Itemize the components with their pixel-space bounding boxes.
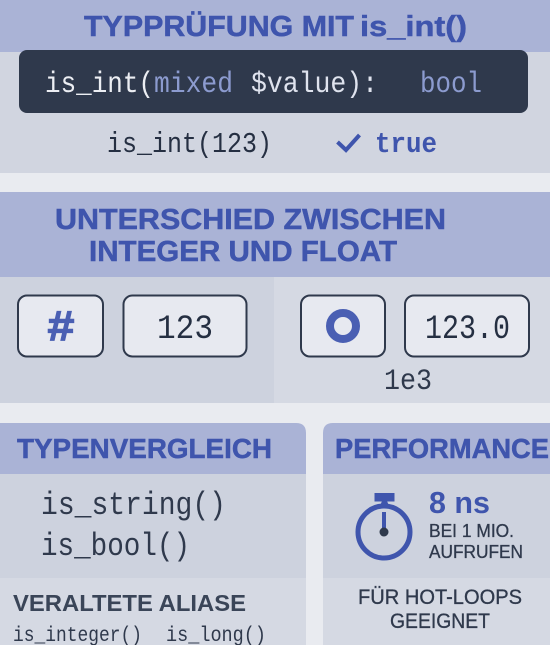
code signature box: bool — [420, 68, 482, 102]
icon box: hash: # — [47, 304, 75, 354]
caption: bei 1 mio. aufrufen: AUFRUFEN — [429, 542, 523, 562]
panel: typprüfung — [0, 0, 550, 173]
code: is_bool: is_bool() — [41, 528, 190, 565]
value box: 123.0: 123.0 — [425, 311, 510, 349]
heading: typprüfung mit is_int: TYPPRÜFUNG MIT — [84, 10, 354, 43]
panel: unterschied integer und float — [0, 192, 550, 403]
code signature box: $value): — [251, 68, 378, 102]
code signature box: is_int( — [45, 68, 154, 102]
icon: stopwatch — [358, 493, 410, 558]
label: 1e3: 1e3 — [384, 365, 432, 399]
sub-panel: float — [274, 277, 550, 403]
heading: unterschied zwischen integer und float: INTEGER UND FLOAT — [89, 236, 397, 268]
note: für hot-loops geeignet: GEEIGNET — [390, 610, 490, 633]
result: true: true — [375, 128, 437, 161]
value box: 123.0 — [405, 296, 529, 356]
icon box: hash — [18, 296, 103, 356]
header band: typenvergleich — [0, 423, 306, 474]
stat: 8 ns: 8 ns — [429, 485, 490, 520]
heading: typprüfung mit is_int: is_int() — [360, 11, 467, 43]
code: is_string: is_string() — [41, 487, 226, 524]
icon: check mark — [338, 135, 360, 150]
sub-panel: integer — [0, 277, 274, 403]
panel: performance — [323, 423, 550, 645]
value box: 123: 123 — [157, 311, 213, 349]
header band: performance — [323, 423, 550, 474]
header band: unterschied — [0, 192, 550, 277]
panel: typenvergleich — [0, 423, 306, 645]
caption: bei 1 mio. aufrufen: BEI 1 MIO. — [429, 521, 514, 541]
code example: is_int(123): is_int(123) — [107, 128, 272, 161]
code signature box — [19, 50, 528, 113]
header band: typprüfung — [0, 0, 550, 52]
value box: 123 — [124, 296, 246, 356]
note: für hot-loops geeignet: FÜR HOT-LOOPS — [358, 586, 522, 609]
heading: performance: PERFORMANCE — [335, 433, 549, 464]
subheading: veraltete aliase: VERALTETE ALIASE — [13, 590, 246, 616]
code signature box: mixed — [154, 68, 233, 102]
heading: unterschied zwischen integer und float: UNTERSCHIED ZWISCHEN — [55, 204, 446, 236]
icon box: circle — [301, 296, 385, 356]
heading: typenvergleich: TYPENVERGLEICH — [17, 433, 272, 464]
